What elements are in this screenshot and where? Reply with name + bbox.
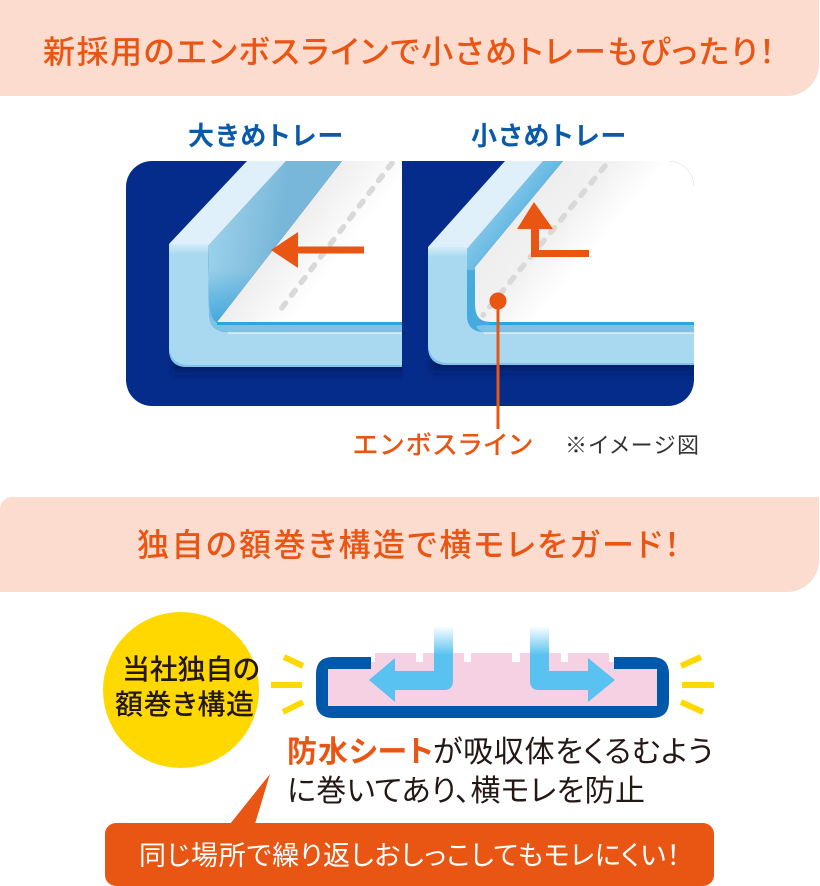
- callout line: emboss line: [490, 292, 506, 429]
- heading band: bottom: 独自の額巻き構造で横モレをガード！: [137, 527, 680, 563]
- illustration: small tray: [428, 161, 711, 378]
- note: image only: ※イメージ図: [565, 433, 699, 458]
- arrow: move left: [271, 232, 364, 268]
- arrow: left flow: [369, 626, 453, 702]
- badge: proprietary structure: [103, 612, 260, 768]
- diagram: wrapped sheet: [271, 626, 714, 718]
- panel: tray illustrations: [126, 161, 711, 406]
- callout: repeated urination: [105, 774, 714, 886]
- heading band: top: 新採用のエンボスラインで小さめトレーもぴったり！: [43, 34, 775, 70]
- absorbent core: [328, 653, 658, 707]
- badge: proprietary structure: 額巻き構造: [115, 689, 254, 720]
- label: large tray: 大きめトレー: [188, 121, 343, 151]
- rays: right: [681, 657, 714, 712]
- badge: proprietary structure: 当社独自の: [122, 654, 260, 685]
- rays: left: [271, 657, 303, 712]
- label: small tray: 小さめトレー: [471, 121, 626, 151]
- callout: repeated urination: 同じ場所で繰り返しおしっこしてもモレにくい！: [139, 841, 680, 871]
- waterproof sheet frame: [316, 657, 669, 718]
- text block: description: [287, 736, 713, 808]
- heading band: top: [0, 0, 819, 96]
- arrow: up then right: [517, 202, 589, 257]
- text block: description: に巻いてあり、横モレを防止: [287, 775, 645, 808]
- arrow: right flow: [530, 626, 615, 702]
- heading band: bottom: [0, 497, 819, 592]
- illustration: large tray: [169, 161, 417, 380]
- label: emboss line: エンボスライン: [353, 430, 532, 460]
- text block: description: 防水シート: [287, 736, 433, 769]
- text block: description: が吸収体をくるむよう: [433, 736, 713, 769]
